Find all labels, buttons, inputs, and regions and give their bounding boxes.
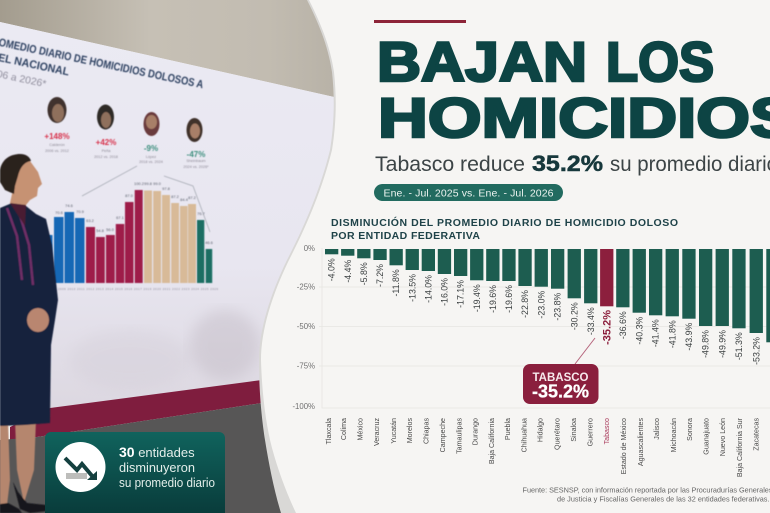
value labels: -23.0% bbox=[536, 291, 546, 319]
state labels: Colima bbox=[340, 418, 348, 440]
value labels: -4.0% bbox=[327, 258, 337, 281]
state labels: Sonora bbox=[686, 418, 694, 441]
slide bar values: 87.0 bbox=[125, 193, 134, 198]
state labels: Jalisco bbox=[653, 418, 661, 440]
slide bar values: 56.0 bbox=[106, 227, 115, 232]
value labels: -19.6% bbox=[504, 285, 514, 313]
slide bar values: 67.1 bbox=[116, 215, 125, 220]
state labels: Veracruz bbox=[373, 418, 381, 446]
y-axis labels: 0% bbox=[304, 244, 315, 253]
state labels: Baja California Sur bbox=[736, 417, 744, 477]
slide bar values: 70.9 bbox=[76, 209, 85, 214]
value labels: -14.0% bbox=[423, 275, 433, 303]
state labels: Puebla bbox=[504, 418, 512, 440]
state labels: Michoacán bbox=[670, 418, 678, 452]
value labels: -33.4% bbox=[586, 307, 596, 335]
value labels: -22.8% bbox=[520, 290, 530, 318]
slide bar values: 87.2 bbox=[171, 194, 180, 199]
callout background bbox=[45, 432, 225, 513]
value labels: -19.4% bbox=[472, 284, 482, 312]
period captions: Calderón bbox=[49, 143, 65, 147]
slide bar values: 46.6 bbox=[205, 240, 214, 245]
value labels: -41.8% bbox=[667, 320, 677, 348]
state labels: Nuevo León bbox=[719, 418, 727, 456]
panel: callout 30 entities bbox=[45, 432, 225, 513]
period captions bbox=[45, 143, 209, 169]
state labels: Durango bbox=[472, 418, 480, 445]
state labels: Zacatecas bbox=[752, 418, 760, 451]
value labels bbox=[327, 258, 761, 365]
state labels: Tlaxcala bbox=[325, 418, 333, 444]
slide bar values: 70.6 bbox=[55, 210, 64, 215]
hair bbox=[0, 154, 31, 194]
leader line bbox=[575, 338, 595, 364]
value labels: -4.4% bbox=[343, 260, 353, 283]
callout text: 30 entidades bbox=[119, 444, 195, 460]
state labels: Querétaro bbox=[554, 418, 562, 450]
state labels: Aguascalientes bbox=[637, 418, 645, 466]
state labels: Chihuahua bbox=[520, 418, 528, 452]
y-axis labels bbox=[292, 244, 315, 411]
slide bar values: 87.2 bbox=[188, 195, 197, 200]
state labels bbox=[325, 417, 760, 477]
y-axis labels: -100% bbox=[292, 402, 315, 411]
date range pill bbox=[374, 184, 563, 201]
y-axis labels: -25% bbox=[297, 282, 315, 292]
period captions: López bbox=[146, 155, 156, 159]
source note: de Justicia y Fiscalías Generales de las 32 entidades federativas. bbox=[557, 494, 770, 504]
state labels: Estado de México bbox=[620, 418, 628, 474]
period captions: 2006 vs. 2012 bbox=[45, 149, 69, 153]
value labels: -51.3% bbox=[734, 332, 744, 360]
chart heading bbox=[331, 216, 678, 242]
panel: main curved background bbox=[259, 0, 770, 513]
subtitle: Tabasco reduce bbox=[375, 153, 525, 176]
state labels: Guerrero bbox=[586, 418, 594, 446]
clasped hands bbox=[27, 308, 49, 332]
chart: decrease by state bbox=[292, 244, 770, 477]
bars bbox=[325, 249, 770, 342]
presidential changes: +148% bbox=[44, 132, 70, 141]
callout box bbox=[523, 364, 598, 404]
callout text: disminuyeron bbox=[119, 460, 195, 475]
value labels: -11.8% bbox=[391, 269, 401, 297]
slide year axis: 2009 2010 2011 2012 2013 2014 2015 2016 2017 2019 2020 2021 2022 2023 2024 2025 2026 bbox=[58, 287, 218, 291]
source note bbox=[522, 486, 770, 504]
subtitle: 35.2% bbox=[532, 151, 603, 176]
person: president in navy dress bbox=[0, 154, 58, 513]
value labels: -43.9% bbox=[684, 323, 694, 351]
state labels: Chiapas bbox=[422, 418, 430, 444]
presidential changes: +42% bbox=[96, 138, 116, 147]
chart heading: DISMINUCIÓN DEL PROMEDIO DIARIO DE HOMICIDIO DOLOSO bbox=[331, 216, 678, 229]
title: HOMICIDIOS bbox=[378, 86, 770, 149]
value labels: -16.0% bbox=[440, 278, 450, 306]
value labels: -23.8% bbox=[553, 293, 563, 321]
projection screen and lower wall bbox=[0, 22, 334, 425]
value labels: -49.8% bbox=[701, 330, 711, 358]
slide bar values: 99.8 bbox=[144, 181, 153, 186]
state labels: Hidalgo bbox=[536, 418, 544, 442]
projected slide bbox=[0, 34, 218, 291]
date range pill: Ene. - Jul. 2025 vs. Ene. - Jul. 2026 bbox=[384, 188, 554, 200]
value labels: -35.2% bbox=[602, 310, 614, 345]
value labels: -53.2% bbox=[751, 337, 761, 365]
callout label: TABASCO bbox=[532, 372, 589, 384]
portrait: Peña bbox=[97, 104, 114, 130]
accent line bbox=[374, 20, 466, 23]
state labels: Guanajuato bbox=[702, 418, 710, 455]
presidential changes bbox=[44, 132, 205, 159]
slide title bbox=[0, 34, 204, 122]
value labels: -17.1% bbox=[456, 280, 466, 308]
value labels: -36.6% bbox=[618, 311, 628, 339]
value labels: -5.8% bbox=[359, 262, 369, 285]
title bbox=[377, 30, 770, 149]
slide bar values: 84.4 bbox=[180, 197, 189, 202]
trend arrows bbox=[82, 166, 210, 232]
slide bar values bbox=[55, 181, 214, 245]
value labels: -13.5% bbox=[407, 274, 417, 302]
neck and face bbox=[10, 161, 42, 205]
state labels: Tabasco bbox=[603, 418, 611, 444]
state labels: Sinaloa bbox=[570, 418, 578, 442]
period captions: 2024 vs. 2026* bbox=[183, 165, 209, 169]
embroidery bbox=[7, 208, 33, 285]
portrait: Sheinbaum bbox=[186, 118, 202, 142]
slide bar values: 54.8 bbox=[96, 228, 105, 233]
legs bbox=[0, 420, 36, 505]
slide bar values: 74.6 bbox=[65, 203, 74, 208]
slide bar chart bbox=[48, 190, 212, 283]
value labels: -7.2% bbox=[375, 264, 385, 287]
value labels: -19.6% bbox=[488, 285, 498, 313]
callout value: -35.2% bbox=[532, 382, 589, 402]
shoes bbox=[0, 482, 47, 513]
slide bar values: 100.2 bbox=[134, 181, 145, 186]
callout text bbox=[119, 444, 215, 490]
wall behind the screen bbox=[0, 0, 334, 97]
state labels: Campeche bbox=[439, 418, 447, 452]
photo: presidential press conference bbox=[0, 0, 334, 513]
period captions: Sheinbaum bbox=[186, 159, 206, 163]
portrait: Calderón bbox=[48, 97, 66, 123]
navy dress bbox=[0, 203, 58, 426]
value labels: -41.4% bbox=[651, 319, 661, 347]
source note: Fuente: SESNSP, con información reportada por las Procuradurías Generales bbox=[522, 486, 770, 494]
y-axis labels: -50% bbox=[297, 322, 315, 331]
blouse collar bbox=[10, 203, 26, 226]
callout: Tabasco bbox=[523, 338, 598, 404]
portrait: López Obrador bbox=[144, 112, 160, 136]
floor bbox=[0, 403, 300, 513]
slide bar values: 76.7 bbox=[197, 211, 206, 216]
state labels: Tamaulipas bbox=[456, 418, 464, 454]
title: BAJAN bbox=[377, 30, 587, 93]
value labels: -30.2% bbox=[569, 302, 579, 330]
chart heading: POR ENTIDAD FEDERATIVA bbox=[331, 230, 480, 242]
presidential changes: -9% bbox=[144, 144, 158, 153]
state labels: México bbox=[356, 418, 364, 440]
value labels: -49.9% bbox=[717, 330, 727, 358]
value labels: -40.3% bbox=[634, 317, 644, 345]
title: LOS bbox=[606, 30, 714, 93]
y-axis labels: -75% bbox=[297, 362, 315, 370]
state labels: Yucatán bbox=[390, 418, 398, 444]
slide bar values: 97.8 bbox=[162, 186, 171, 191]
state labels: Morelos bbox=[406, 418, 414, 443]
callout text: su promedio diario bbox=[119, 475, 215, 490]
period captions: Peña bbox=[102, 149, 111, 153]
maroon wall base bbox=[10, 380, 262, 440]
state labels: Baja California bbox=[488, 418, 496, 464]
slide bar values: 99.0 bbox=[153, 181, 162, 186]
icon: descending trend arrow bbox=[56, 442, 106, 492]
period captions: 2012 vs. 2018 bbox=[94, 155, 118, 159]
slide bar values: 63.2 bbox=[86, 218, 95, 223]
period captions: 2018 vs. 2024 bbox=[139, 160, 163, 164]
presidential changes: -47% bbox=[187, 150, 205, 159]
